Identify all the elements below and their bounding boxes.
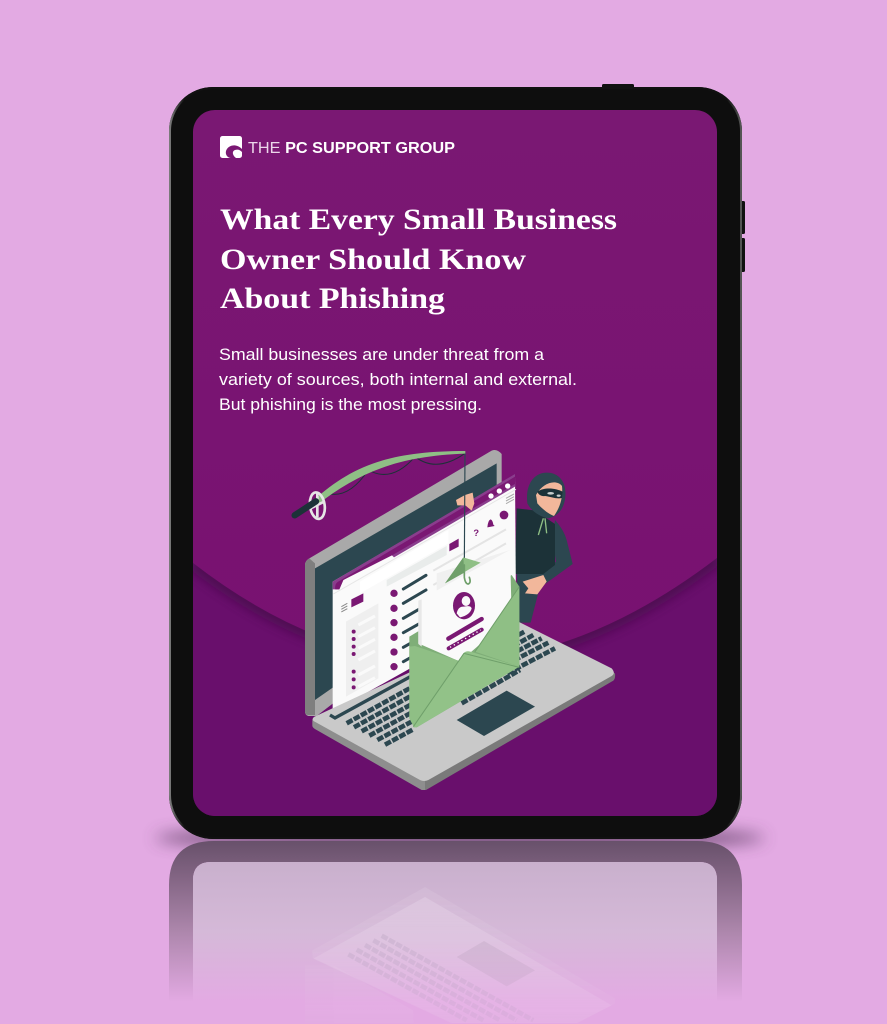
hinge slot bbox=[330, 675, 413, 718]
reflected laptop bbox=[314, 897, 611, 1012]
fishing rod bbox=[295, 451, 465, 520]
browser title bar bbox=[333, 474, 515, 589]
logo bbox=[220, 136, 455, 158]
title: About Phishing bbox=[220, 282, 445, 315]
message list bbox=[387, 546, 447, 587]
curved lower panel bbox=[193, 558, 717, 816]
sidebar panel bbox=[346, 603, 378, 697]
sidebar logo bbox=[351, 593, 363, 607]
infographic canvas bbox=[152, 84, 768, 1012]
bait flag bbox=[445, 557, 481, 583]
intro text: But phishing is the most pressing. bbox=[219, 395, 482, 414]
hacker figure bbox=[515, 473, 573, 623]
tablet reflection bbox=[169, 841, 742, 1023]
envelope back bbox=[409, 575, 519, 727]
title bbox=[220, 203, 617, 315]
address bar bbox=[360, 530, 448, 593]
intro text: Small businesses are under threat from a bbox=[219, 345, 545, 364]
toolbar icons: ? bbox=[473, 528, 479, 538]
envelope front bbox=[409, 587, 519, 727]
phishing email page bbox=[418, 550, 512, 662]
toolbar icons bbox=[449, 511, 508, 551]
rod reel bbox=[308, 491, 326, 520]
window buttons bbox=[488, 483, 510, 499]
laptop base bbox=[312, 622, 615, 790]
keyboard bbox=[347, 631, 555, 745]
side buttons bbox=[602, 84, 745, 272]
trackpad bbox=[457, 691, 535, 736]
intro text bbox=[219, 345, 577, 414]
intro text: variety of sources, both internal and external. bbox=[219, 370, 577, 389]
tablet screen bbox=[193, 110, 717, 816]
login fields bbox=[448, 619, 482, 639]
fishing hook bbox=[464, 565, 470, 584]
illustration: phishing laptop bbox=[295, 450, 615, 790]
browser window bbox=[333, 474, 516, 712]
hand on window bbox=[456, 493, 474, 511]
logo wordmark: THE PC SUPPORT GROUP bbox=[248, 140, 455, 157]
tablet body bbox=[169, 84, 745, 839]
title: Owner Should Know bbox=[220, 243, 526, 276]
user icon bbox=[453, 592, 475, 619]
tablet frame bbox=[169, 87, 742, 839]
rod grip bbox=[295, 501, 316, 515]
fishing line bbox=[463, 453, 467, 565]
title: What Every Small Business bbox=[220, 203, 617, 236]
laptop lid bbox=[305, 450, 502, 716]
ground shadow bbox=[155, 825, 765, 851]
logo mark bbox=[220, 136, 242, 158]
